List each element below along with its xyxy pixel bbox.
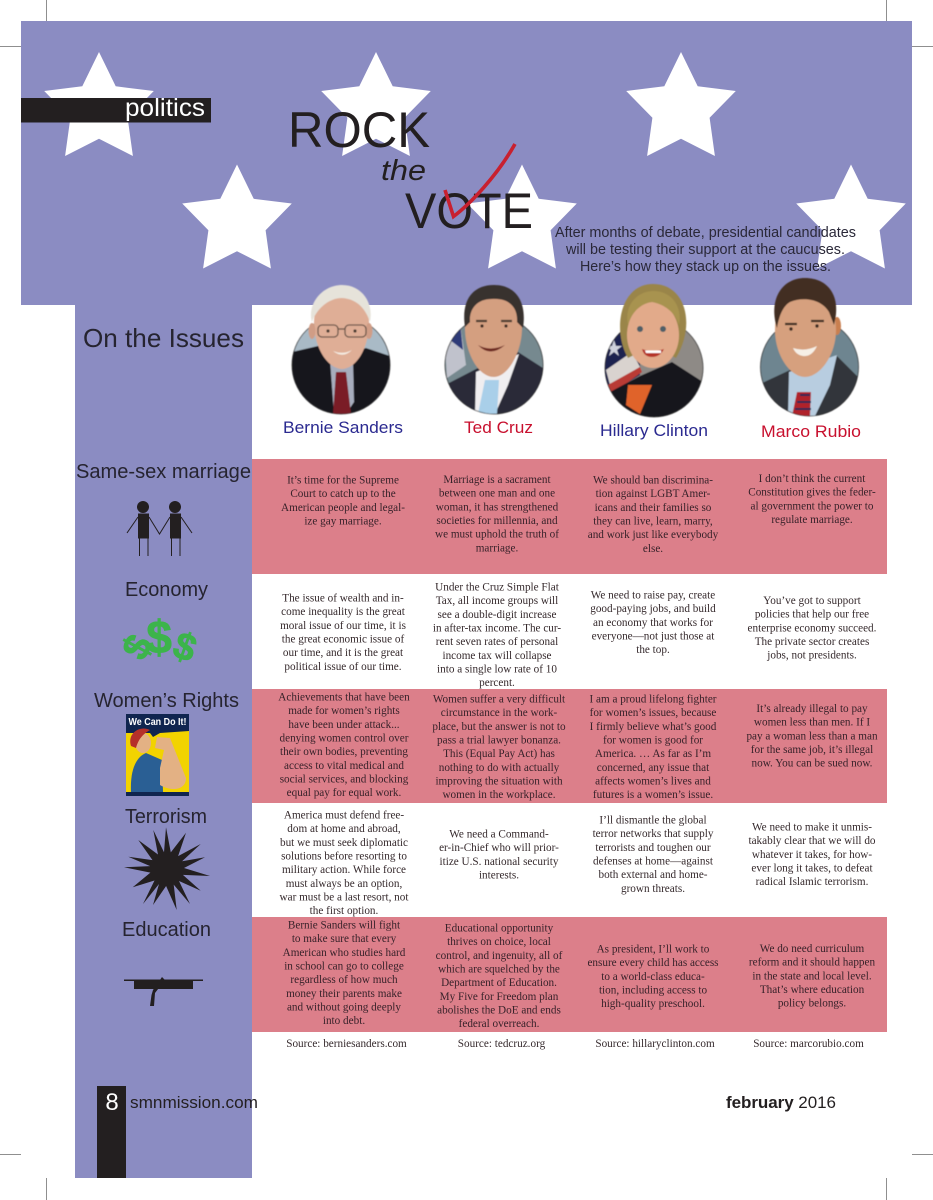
- quotes: same-sex marriage row: ize gay marriage.: [304, 515, 382, 527]
- quotes: education row: in school can go to college: [284, 960, 404, 972]
- portrait: Marco Rubio: [760, 278, 859, 416]
- issue label: Same-sex marriage: Same-sex marriage: [76, 461, 251, 483]
- quotes: economy row: You’ve got to support: [763, 595, 862, 607]
- quotes: terrorism row: solutions before resorting to: [281, 850, 407, 862]
- quotes: education row: control, and ingenuity, all of: [436, 950, 563, 962]
- quotes: women's rights row: Women suffer a very difficult: [433, 694, 566, 706]
- quotes: women's rights row: equal pay for equal work.: [287, 787, 402, 799]
- quotes: economy row: come inequality is the great: [281, 606, 406, 618]
- sources: Source: berniesanders.com: [286, 1038, 407, 1050]
- quotes: terrorism row: terrorists and toughen our: [595, 842, 711, 854]
- quotes: education row: regardless of how much: [290, 974, 398, 986]
- quotes: same-sex marriage row: and work just like everybody: [588, 529, 719, 541]
- quotes: terrorism row: I’ll dismantle the global: [599, 814, 707, 826]
- quotes: education row: in the state and local level.: [752, 970, 872, 982]
- page number block: [97, 1086, 126, 1178]
- pink row: education: [252, 917, 887, 1032]
- quotes: same-sex marriage row: we must uphold the truth of: [435, 529, 559, 541]
- quotes: terrorism row: itize U.S. national security: [440, 856, 559, 868]
- quotes: education row: reform and it should happen: [749, 957, 875, 969]
- quotes: education row: Educational opportunity: [445, 922, 554, 934]
- icon: dollar signs: $: [168, 624, 202, 671]
- sources: [286, 1038, 864, 1050]
- candidate names: Bernie Sanders: [283, 418, 403, 437]
- banner: [21, 21, 912, 305]
- icon: dollar signs: $: [114, 628, 161, 667]
- candidate names: Hillary Clinton: [600, 421, 708, 440]
- quotes: economy row: rent seven rates of personal: [436, 636, 558, 648]
- quotes: education row: As president, I’ll work to: [597, 944, 710, 956]
- intro text: [555, 225, 856, 275]
- quotes: same-sex marriage row: Marriage is a sacrament: [443, 474, 551, 486]
- quotes: education row: American who studies hard: [283, 947, 406, 959]
- quotes: women's rights row: have been under attack...: [288, 719, 400, 731]
- icon: graduation cap: [124, 977, 203, 1006]
- quotes: economy row: the top.: [636, 644, 670, 656]
- quotes: women's rights row: women less than men. If I: [754, 717, 870, 729]
- quotes: economy row: in after-tax income. The cur-: [433, 622, 561, 634]
- quotes: education row: money their parents make: [286, 988, 402, 1000]
- intro text: will be testing their support at the caucuses.: [565, 242, 845, 258]
- quotes: women's rights row: Achievements that have been: [278, 692, 410, 704]
- quotes: same-sex marriage row: else.: [643, 543, 663, 555]
- icon: dollar signs: [114, 611, 202, 671]
- quotes: economy row: enterprise economy succeed.: [748, 622, 877, 634]
- quotes: same-sex marriage row: marriage.: [476, 542, 518, 554]
- quotes: same-sex marriage row: between one man and one: [439, 488, 555, 500]
- quotes: women's rights row: This (Equal Pay Act) has: [443, 748, 555, 760]
- icon: starburst explosion: [124, 827, 210, 910]
- quotes: terrorism row: dom at home and abroad,: [287, 823, 401, 835]
- quotes: economy row: income tax will collapse: [442, 650, 552, 662]
- quotes: economy row: Under the Cruz Simple Flat: [435, 582, 560, 594]
- quotes: women's rights row: made for women’s rights: [288, 705, 400, 717]
- quotes: terrorism row: We need a Command-: [449, 828, 549, 840]
- quotes: education row: ensure every child has access: [587, 957, 719, 969]
- quotes: economy row: The issue of wealth and in-: [282, 592, 404, 604]
- quotes: economy row: Tax, all income groups will: [436, 595, 558, 607]
- quotes: education row: That’s where education: [760, 984, 865, 996]
- quotes: education row: to make sure that every: [292, 933, 397, 945]
- quotes: women's rights row: America. … As far as I’m: [595, 748, 711, 760]
- date footer: february 2016: [726, 1093, 836, 1112]
- heading: On the Issues: On the Issues: [83, 323, 244, 353]
- quotes: education row: Department of Education.: [441, 977, 557, 989]
- quotes: terrorism row: military action. While force: [282, 864, 406, 876]
- quotes: same-sex marriage row: they can live, learn, marry,: [593, 515, 713, 527]
- quotes: economy row: political issue of our time.: [284, 661, 402, 673]
- quotes: same-sex marriage row: regulate marriage.: [771, 514, 853, 526]
- quotes: terrorism row: terror networks that supply: [593, 828, 714, 840]
- quotes: same-sex marriage row: woman, it has strengthened: [436, 501, 559, 513]
- quotes: women's rights row: for women is good for: [603, 734, 703, 746]
- quotes: economy row: policies that help our free: [755, 609, 869, 621]
- icon: dollar signs: $: [146, 611, 172, 663]
- quotes: terrorism row: war must be a last resort, not: [280, 891, 409, 903]
- quotes: same-sex marriage row: It’s time for the Supreme: [287, 474, 399, 486]
- quotes: same-sex marriage row: al government the power to: [750, 500, 874, 512]
- portrait: Hillary Clinton: [604, 284, 703, 417]
- quotes: economy row: moral issue of our time, it is: [280, 620, 406, 632]
- quotes: terrorism row: both external and home-: [598, 869, 708, 881]
- quotes: economy row: our time, and it is the great: [283, 647, 404, 659]
- quotes: women's rights row: futures is a women’s issue.: [593, 789, 713, 801]
- issue label: Terrorism: Terrorism: [125, 806, 207, 828]
- quotes: women's rights row: place, but the answer is not to: [432, 721, 566, 733]
- quotes: women's rights row: pass a trial lawyer bonanza.: [437, 734, 561, 746]
- quotes: education row: to a world-class educa-: [601, 971, 705, 983]
- title: Rock the Vote: [288, 102, 533, 239]
- quotes: education row: federal overreach.: [459, 1018, 540, 1030]
- pink row: same-sex marriage: [252, 459, 887, 574]
- quotes: women's rights row: nothing to do with actually: [439, 762, 560, 774]
- quotes: women's rights row: circumstance in the work-: [441, 707, 558, 719]
- quotes: women's rights row: social services, and blocking: [280, 773, 409, 785]
- quotes: terrorism row: radical Islamic terrorism.: [756, 876, 869, 888]
- candidate names: [283, 418, 861, 441]
- quotes: terrorism row: whatever it takes, for how-: [752, 849, 872, 861]
- sources: Source: marcorubio.com: [753, 1038, 864, 1050]
- portrait: Ted Cruz: [445, 285, 543, 414]
- quotes: economy row: The private sector creates: [755, 636, 869, 648]
- quotes: same-sex marriage row: icans and their families so: [595, 502, 712, 514]
- quotes: terrorism row: ever long it takes, to defeat: [751, 862, 873, 874]
- section tag: politics: [21, 94, 211, 122]
- quotes: education row: We do need curriculum: [760, 943, 864, 955]
- quotes: education row: tion, including access to: [599, 984, 707, 996]
- candidate names: Ted Cruz: [464, 418, 533, 437]
- quotes: terrorism row: America must defend free-: [284, 810, 404, 822]
- quotes: women's rights row: affects women’s lives and: [595, 775, 711, 787]
- quotes: women's rights row: concerned, any issue that: [597, 762, 710, 774]
- quotes: same-sex marriage row: We should ban discrimina-: [593, 474, 713, 486]
- quotes: economy row: the great economic issue of: [282, 633, 404, 645]
- quotes: same-sex marriage row: [281, 473, 876, 555]
- quotes: economy row: an economy that works for: [593, 617, 713, 629]
- quotes: education row: which are squelched by the: [438, 963, 560, 975]
- quotes: economy row: percent.: [479, 677, 515, 689]
- quotes: education row: into debt.: [323, 1015, 365, 1027]
- title: Rock the Vote: the: [381, 155, 426, 187]
- icon: We Can Do It poster: We Can Do It!: [128, 717, 186, 728]
- panel: issues sidebar: [75, 305, 252, 1178]
- sources: Source: hillaryclinton.com: [595, 1038, 715, 1050]
- quotes: education row: thrives on choice, local: [447, 936, 551, 948]
- quotes: women's rights row: I firmly believe what’s good: [590, 721, 717, 733]
- quotes: same-sex marriage row: American people and legal-: [281, 502, 405, 514]
- stars: [44, 52, 906, 268]
- icon: red check mark: [445, 144, 515, 216]
- quotes: women's rights row: for the same job, it’s illegal: [751, 744, 873, 756]
- icon: couple holding hands: [127, 501, 192, 556]
- quotes: terrorism row: but we must seek diplomatic: [280, 837, 408, 849]
- quotes: women's rights row: [278, 692, 878, 801]
- title: Rock the Vote: ROCK: [288, 102, 430, 158]
- quotes: economy row: everyone—not just those at: [592, 630, 715, 642]
- quotes: terrorism row: grown threats.: [621, 883, 685, 895]
- quotes: same-sex marriage row: tion against LGBT Amer-: [596, 488, 711, 500]
- portrait: Bernie Sanders: [292, 285, 390, 414]
- quotes: women's rights row: access to vital medical and: [284, 760, 404, 772]
- candidate names: Marco Rubio: [761, 422, 861, 441]
- quotes: education row: Bernie Sanders will fight: [288, 920, 401, 932]
- intro text: After months of debate, presidential candidates: [555, 225, 856, 241]
- quotes: same-sex marriage row: Constitution gives the feder-: [748, 487, 876, 499]
- quotes: terrorism row: the first option.: [310, 905, 379, 917]
- quotes: same-sex marriage row: societies for millennia, and: [436, 515, 558, 527]
- quotes: terrorism row: We need to make it unmis-: [752, 822, 872, 834]
- intro text: Here’s how they stack up on the issues.: [580, 259, 831, 275]
- page number block: 8: [105, 1089, 119, 1116]
- quotes: women's rights row: improving the situation with: [435, 775, 563, 787]
- quotes: education row: [283, 920, 875, 1030]
- icon: We Can Do It poster: [126, 714, 189, 796]
- issue label: Economy: Economy: [125, 579, 208, 601]
- quotes: economy row: [280, 582, 877, 689]
- issue label: Women's Rights: Women’s Rights: [94, 690, 239, 712]
- quotes: women's rights row: denying women control over: [280, 732, 409, 744]
- quotes: economy row: good-paying jobs, and build: [590, 603, 716, 615]
- quotes: terrorism row: interests.: [479, 869, 519, 881]
- quotes: terrorism row: [280, 810, 876, 917]
- quotes: same-sex marriage row: Court to catch up to the: [290, 488, 396, 500]
- quotes: terrorism row: takably clear that we will do: [748, 835, 876, 847]
- sources: Source: tedcruz.org: [458, 1038, 546, 1050]
- title: Rock the Vote: VOTE: [405, 183, 533, 239]
- website footer: smnmission.com: [130, 1093, 258, 1112]
- quotes: terrorism row: er-in-Chief who will prior-: [439, 842, 559, 854]
- quotes: economy row: into a single low rate of 10: [437, 663, 557, 675]
- quotes: women's rights row: women in the workplace.: [442, 789, 556, 801]
- quotes: education row: and without going deeply: [287, 1001, 401, 1013]
- quotes: women's rights row: I am a proud lifelong fighter: [589, 694, 717, 706]
- issue label: Education: Education: [122, 919, 211, 941]
- quotes: education row: My Five for Freedom plan: [440, 991, 559, 1003]
- quotes: women's rights row: It’s already illegal to pay: [756, 703, 868, 715]
- quotes: economy row: jobs, not presidents.: [766, 650, 857, 662]
- quotes: women's rights row: their own bodies, preventing: [280, 746, 408, 758]
- quotes: education row: abolishes the DoE and ends: [437, 1004, 561, 1016]
- quotes: education row: policy belongs.: [778, 998, 846, 1010]
- quotes: women's rights row: pay a woman less than a man: [746, 730, 878, 742]
- quotes: economy row: see a double-digit increase: [438, 609, 557, 621]
- quotes: terrorism row: defenses at home—against: [593, 855, 714, 867]
- quotes: women's rights row: for women’s issues, because: [590, 707, 716, 719]
- quotes: same-sex marriage row: I don’t think the current: [759, 473, 866, 485]
- pink row: women's rights: [252, 689, 887, 803]
- quotes: terrorism row: must always be an option,: [286, 878, 402, 890]
- quotes: education row: high-quality preschool.: [601, 998, 705, 1010]
- section tag: politics: politics: [125, 94, 205, 122]
- quotes: economy row: We need to raise pay, create: [591, 590, 715, 602]
- quotes: women's rights row: now. You can be sued now.: [752, 758, 873, 770]
